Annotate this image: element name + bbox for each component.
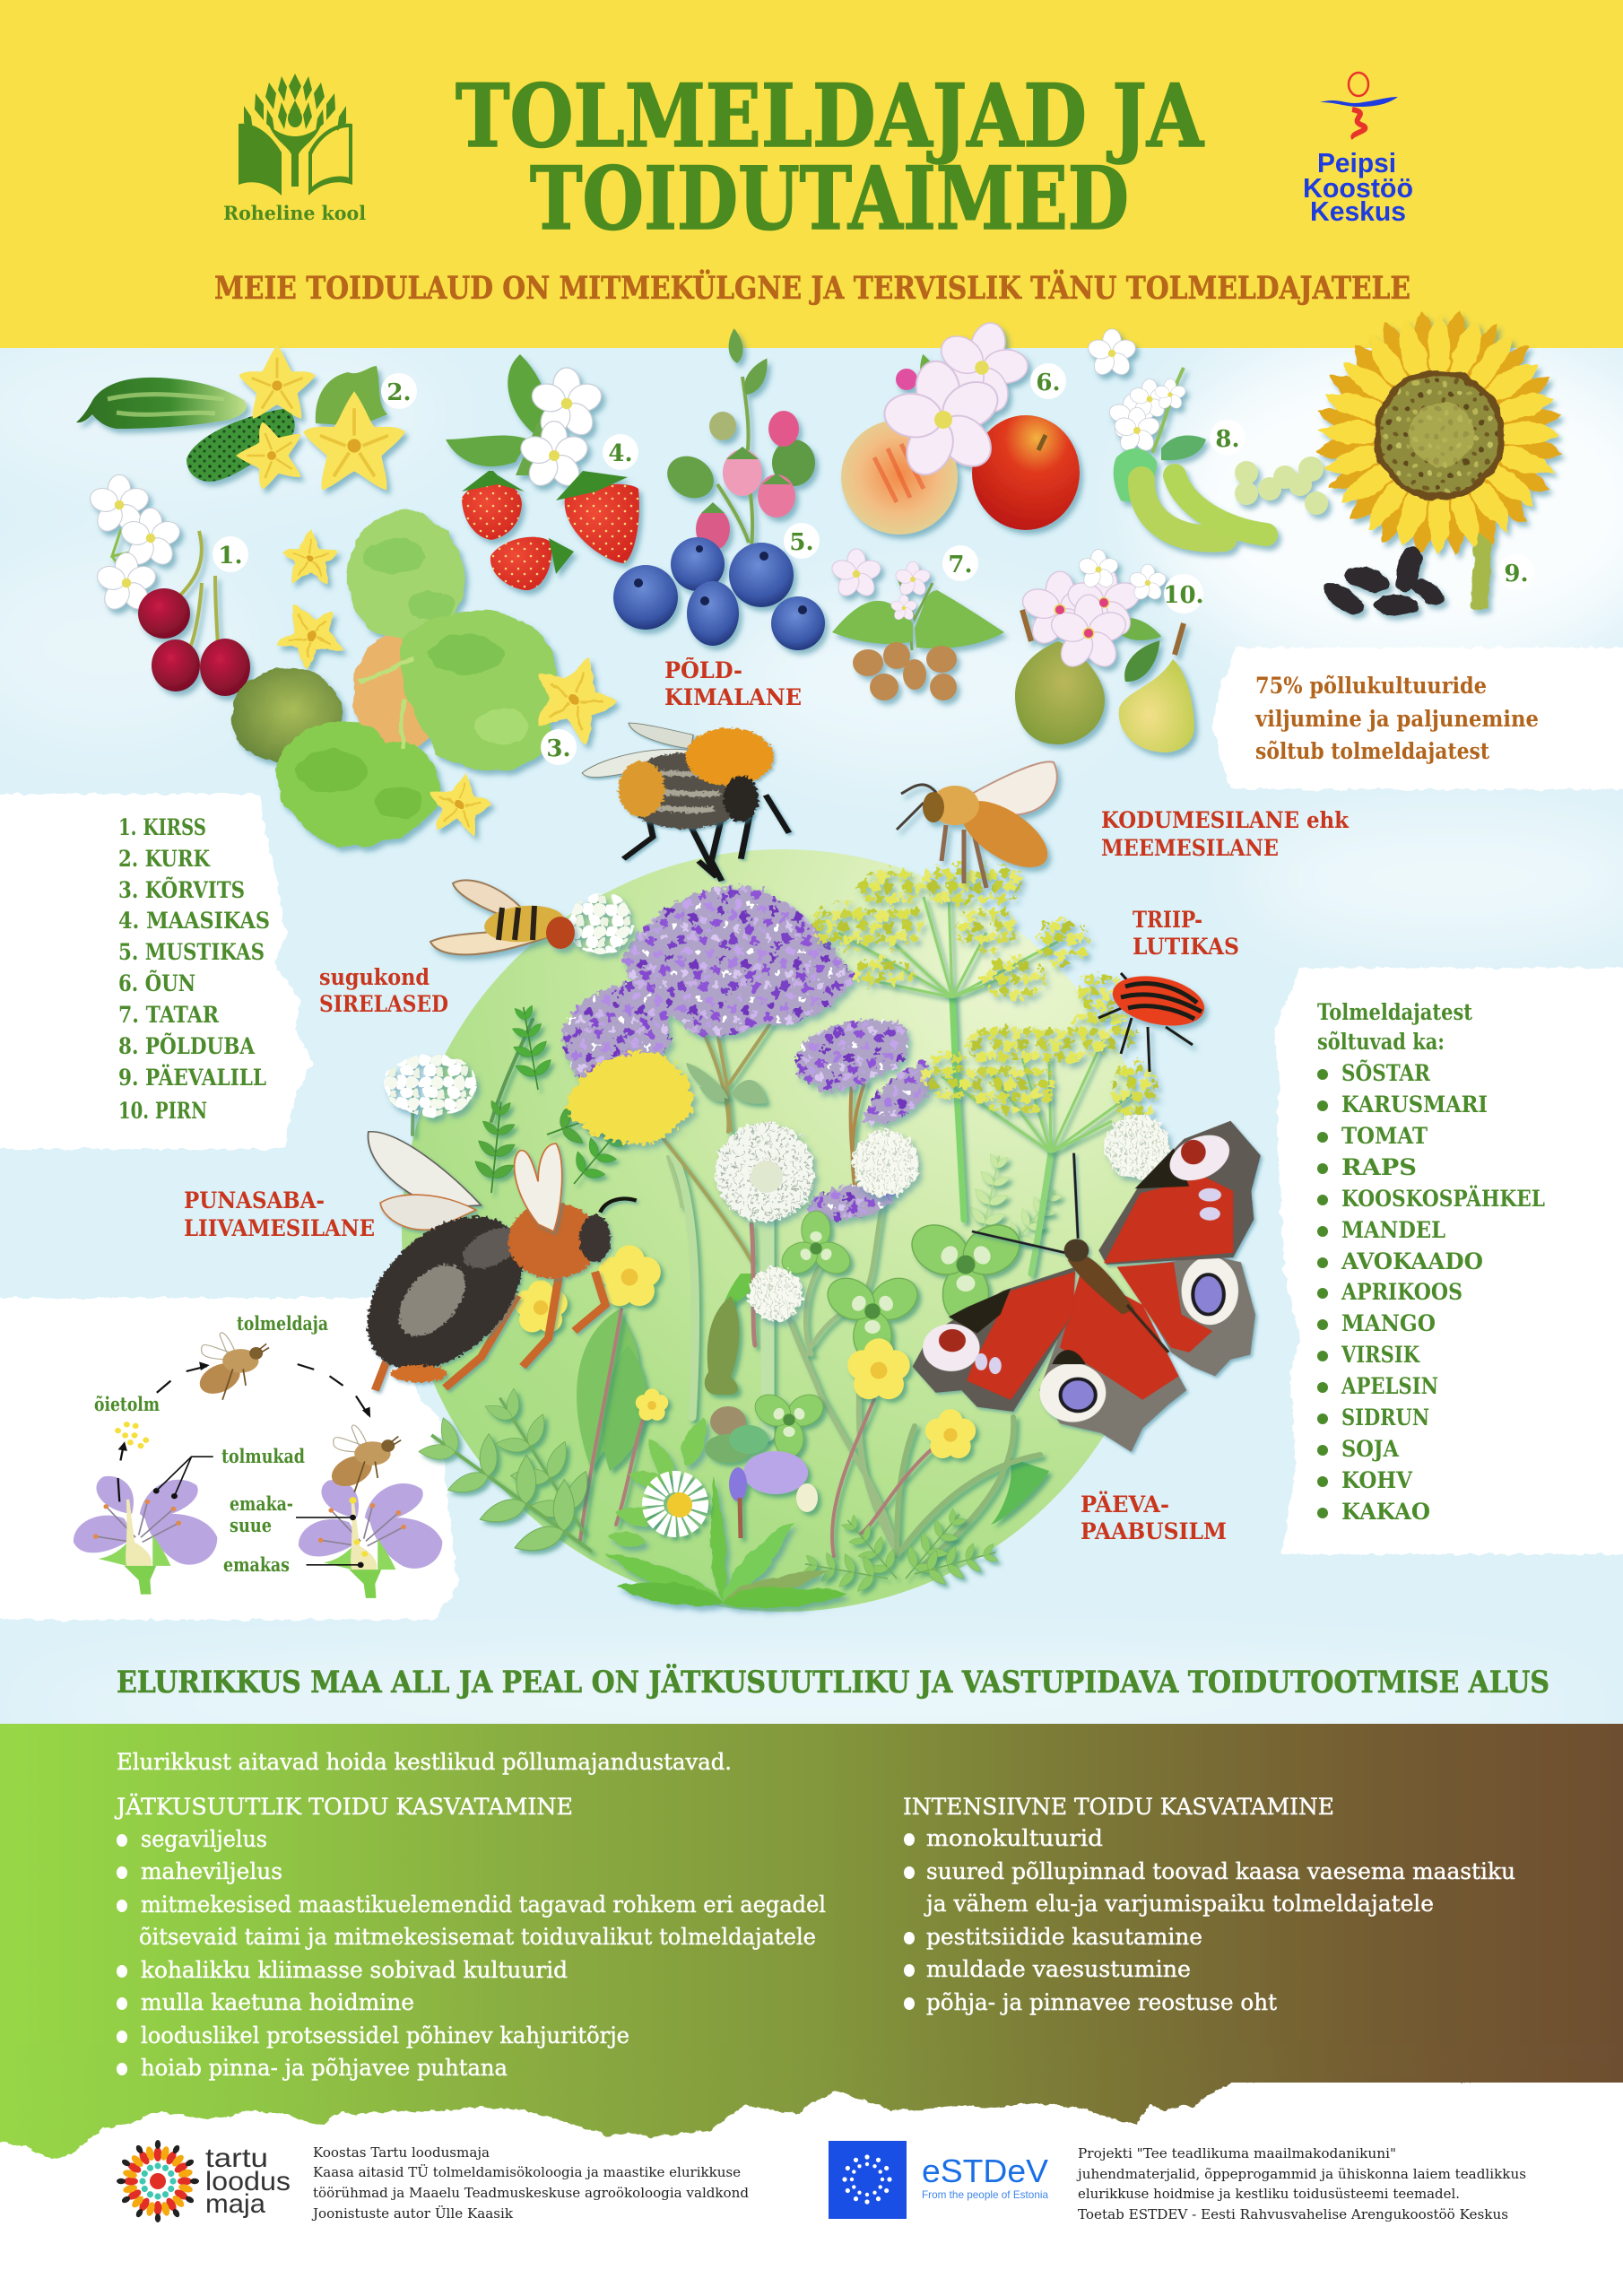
meadow plants xyxy=(383,862,1169,1612)
logo: Peipsi Koostöö Keskus xyxy=(1303,73,1413,227)
panel: crop list: 7. TATAR xyxy=(118,1002,219,1028)
illustration: blueberries xyxy=(613,327,825,650)
purple valerian heads xyxy=(562,886,932,1220)
label: põld-kimalane: PÕLD- xyxy=(664,657,742,683)
panel: other pollinator dependent crops: TOMAT xyxy=(1341,1123,1428,1149)
credits: project: elurikkuse hoidmise ja kestliku toidusüsteemi teemadel. xyxy=(1078,2186,1460,2202)
panel: crop list: 4. MAASIKAS xyxy=(118,908,270,934)
number 5: 5. xyxy=(789,529,814,556)
label: triip-lutikas xyxy=(1133,907,1239,960)
big meadow circle xyxy=(402,849,1164,1612)
number 3 xyxy=(541,729,577,765)
illustration: strawberries xyxy=(446,354,639,590)
subtitle: MEIE TOIDULAUD ON MITMEKÜLGNE JA TERVISLIK TÄNU TOLMELDAJATELE xyxy=(214,268,1410,307)
credits: Tartu loodusmaja: Koostas Tartu loodusmaja xyxy=(313,2144,490,2161)
body and antennae xyxy=(972,1153,1078,1253)
insect: red-tailed mining bee xyxy=(336,1132,637,1396)
panel: other pollinator dependent crops: SOJA xyxy=(1341,1436,1400,1462)
illustration: sunflower xyxy=(1315,309,1563,621)
panel: other pollinator dependent crops xyxy=(1274,968,1623,1554)
column: intensive: suured põllupinnad toovad kaasa vaesema maastiku xyxy=(926,1858,1515,1884)
panel: 75 percent callout xyxy=(1212,648,1623,789)
column: sustainable: looduslikel protsessidel põhinev kahjuritõrje xyxy=(141,2022,629,2048)
column: intensive: põhja- ja pinnavee reostuse oht xyxy=(926,1989,1277,2015)
panel: other pollinator dependent crops: RAPS xyxy=(1341,1154,1417,1180)
pollination diagram: emakas xyxy=(223,1553,290,1576)
dandelion bud xyxy=(705,1296,739,1395)
panel: other pollinator dependent crops: APRIKOOS xyxy=(1341,1279,1462,1305)
column: sustainable: kohalikku kliimasse sobivad kultuurid xyxy=(141,1957,568,1983)
column: intensive: pestitsiidide kasutamine xyxy=(926,1924,1202,1950)
number 2: 2. xyxy=(386,379,412,406)
number 4: 4. xyxy=(608,440,633,467)
panel: other pollinator dependent crops: MANDEL xyxy=(1341,1217,1445,1243)
illustration: pumpkin xyxy=(231,509,629,846)
panel: 75 percent callout: 75% põllukultuuride xyxy=(1255,673,1487,699)
illustration: cucumber xyxy=(76,345,405,490)
pollination diagram xyxy=(74,1312,442,1598)
credits: Tartu loodusmaja: töörühmad ja Maaelu Teadmuskeskuse agroökoloogia valdkond xyxy=(313,2185,749,2201)
logo: Tartu loodusmaja: maja xyxy=(205,2189,265,2219)
ground ivy xyxy=(705,1406,818,1538)
panel: crop list: 6. ÕUN xyxy=(118,970,195,996)
basal leaves rosette xyxy=(601,1474,848,1612)
logo: ESTDEV: eSTDeV xyxy=(922,2152,1048,2189)
panel: other pollinator dependent crops: KARUSMARI xyxy=(1341,1091,1488,1118)
illustration: apples xyxy=(841,311,1080,535)
number 1: 1. xyxy=(218,543,243,570)
panel: other pollinator dependent crops: KAKAO xyxy=(1341,1499,1430,1525)
pollen xyxy=(115,1422,368,1557)
label: päeva-paabusilm: PÄEVA- xyxy=(1081,1492,1169,1518)
credits: project xyxy=(1076,2145,1526,2222)
panel: crop list: 3. KÕRVITS xyxy=(118,877,245,903)
panel: crop list: 8. PÕLDUBA xyxy=(118,1033,256,1059)
credits: Tartu loodusmaja: Joonistuste autor Ülle Kaasik xyxy=(311,2205,514,2222)
number 6: 6. xyxy=(1036,370,1061,396)
logo: Peipsi Koostöö Keskus: Koostöö xyxy=(1303,172,1413,204)
column: sustainable: maheviljelus xyxy=(141,1858,282,1884)
column: sustainable: hoiab pinna- ja põhjavee puhtana xyxy=(141,2055,508,2081)
column: intensive: ja vähem elu-ja varjumispaiku tolmeldajatele xyxy=(924,1891,1434,1917)
label: sugukond sirelased: sugukond xyxy=(319,964,430,990)
title: TOLMELDAJAD JA xyxy=(456,65,1204,167)
label: põld-kimalane: KIMALANE xyxy=(664,684,802,710)
seed, clover heads and yarrow xyxy=(383,893,1169,1321)
bee on flower xyxy=(325,1425,401,1492)
panel: crop list: 2. KURK xyxy=(118,846,211,872)
yellow umbels xyxy=(812,862,1158,1120)
pollination diagram: suue xyxy=(230,1514,272,1536)
flower left xyxy=(74,1476,217,1595)
logo: Roheline kool xyxy=(223,74,366,224)
insect: bumblebee xyxy=(582,723,789,881)
panel: 75 percent callout: sõltub tolmeldajatest xyxy=(1255,738,1489,764)
sage-green leaves by valerian xyxy=(686,1063,767,1104)
panel: crop list: 9. PÄEVALILL xyxy=(118,1065,266,1091)
credits: project: Projekti "Tee teadlikuma maailmakodanikuni" xyxy=(1078,2145,1396,2161)
insect: hoverfly xyxy=(430,880,575,954)
arrows xyxy=(118,1364,369,1565)
column: sustainable: mulla kaetuna hoidmine xyxy=(141,1989,414,2015)
yellow composite flower xyxy=(565,1051,693,1144)
label: sugukond sirelased: SIRELASED xyxy=(319,991,448,1017)
pollination diagram: tolmukad xyxy=(221,1445,305,1467)
number 3: 3. xyxy=(546,735,571,762)
panel: crop list: 5. MUSTIKAS xyxy=(118,939,265,965)
header band xyxy=(0,0,1623,348)
label: kodumesilane xyxy=(1101,807,1350,861)
label: triip-lutikas: LUTIKAS xyxy=(1133,934,1239,960)
illustration: field bean xyxy=(1086,329,1328,539)
umbel stems xyxy=(838,897,1132,1152)
panel: crop list: 1. KIRSS xyxy=(118,814,206,840)
column: sustainable: JÄTKUSUUTLIK TOIDU KASVATAMINE xyxy=(114,1794,573,1820)
insect: striped bug xyxy=(1098,969,1209,1072)
number 8: 8. xyxy=(1215,426,1240,453)
logo: Tartu loodusmaja xyxy=(116,2139,291,2223)
yellow small flowers xyxy=(510,1245,979,1463)
label: punasaba-liivamesilane: LIIVAMESILANE xyxy=(184,1215,375,1241)
logo: Peipsi Koostöö Keskus: Peipsi xyxy=(1317,147,1396,178)
label: kodumesilane: KODUMESILANE ehk xyxy=(1101,807,1350,833)
illustration: pears xyxy=(1015,550,1194,752)
panel: other pollinator dependent crops: SIDRUN xyxy=(1341,1405,1429,1431)
label: triip-lutikas: TRIIP- xyxy=(1133,907,1202,933)
number 1 xyxy=(213,536,248,572)
label: põld-kimalane xyxy=(664,657,802,710)
illustration: buckwheat xyxy=(829,549,1004,700)
sky background with clouds xyxy=(0,332,1623,1749)
label: päeva-paabusilm: PAABUSILM xyxy=(1081,1518,1227,1544)
panel: other pollinator dependent crops: sõltuvad ka: xyxy=(1317,1029,1445,1055)
panel: other pollinator dependent crops: MANGO xyxy=(1341,1310,1436,1336)
label: sugukond sirelased xyxy=(319,964,448,1017)
number 5 xyxy=(784,523,820,559)
panel: other pollinator dependent crops: VIRSIK xyxy=(1341,1342,1420,1368)
panel: other pollinator dependent crops: KOHV xyxy=(1341,1467,1413,1493)
credits: project: juhendmaterjalid, õppeprogammid ja ühiskonna laiem teadlikkus xyxy=(1076,2166,1526,2182)
stems xyxy=(412,997,1051,1565)
panel: other pollinator dependent crops: AVOKAADO xyxy=(1341,1248,1483,1274)
bee top xyxy=(194,1333,269,1400)
intro: Elurikkust aitavad hoida kestlikud põllumajandustavad. xyxy=(117,1749,732,1775)
logo: Roheline kool: Roheline kool xyxy=(223,202,366,224)
pollination diagram: tolmeldaja xyxy=(237,1312,328,1335)
panel: other pollinator dependent crops: APELSIN xyxy=(1341,1373,1438,1399)
column: intensive: monokultuurid xyxy=(926,1825,1103,1851)
trifoliate clover leaves xyxy=(742,1211,1028,1470)
small serrated leaves xyxy=(608,1414,713,1550)
column: sustainable xyxy=(114,1794,826,2081)
pollination diagram: õietolm xyxy=(94,1393,160,1415)
panel: farming comparison gradient band xyxy=(0,1724,1623,2158)
column: intensive xyxy=(903,1794,1515,2015)
panel: pollination diagram background xyxy=(0,1298,458,1620)
number 7: 7. xyxy=(948,552,973,578)
column: sustainable: õitsevaid taimi ja mitmekesisemat toiduvalikut tolmeldajatele xyxy=(139,1924,816,1950)
title: TOIDUTAIMED xyxy=(530,148,1129,249)
insect: honeybee xyxy=(897,761,1058,888)
panel: 75 percent callout: viljumine ja paljunemine xyxy=(1254,706,1539,732)
number 2 xyxy=(381,373,417,409)
lower left wing xyxy=(1039,1276,1186,1452)
logo: ESTDEV: From the people of Estonia xyxy=(922,2188,1048,2201)
label: punasaba-liivamesilane: PUNASABA- xyxy=(184,1187,325,1213)
credits: project: Toetab ESTDEV - Eesti Rahvusvahelise Arengukoostöö Keskus xyxy=(1078,2206,1508,2222)
number 9: 9. xyxy=(1504,561,1529,587)
panel: crop list xyxy=(0,794,313,1149)
panel: crop list: 10. PIRN xyxy=(118,1098,207,1124)
illustration: cherries xyxy=(87,474,250,696)
number 10 xyxy=(1163,574,1204,613)
number 9 xyxy=(1498,554,1534,590)
column: sustainable: mitmekesised maastikuelemendid tagavad rohkem eri aegadel xyxy=(141,1892,826,1918)
lower right wing xyxy=(1122,1255,1255,1376)
number 8 xyxy=(1210,420,1245,456)
upper right wing xyxy=(1098,1121,1261,1265)
number 6 xyxy=(1030,363,1066,399)
credits: Tartu loodusmaja: Kaasa aitasid TÜ tolmeldamisökoloogia ja maastike elurikkuse xyxy=(313,2164,741,2180)
panel: other pollinator dependent crops: KOOSKOSPÄHKEL xyxy=(1341,1186,1545,1212)
credits: Tartu loodusmaja xyxy=(311,2144,749,2222)
title xyxy=(456,65,1204,249)
fern leaves xyxy=(399,1002,1002,1598)
upper left wing xyxy=(913,1267,1075,1412)
panel: other pollinator dependent crops: SÕSTAR xyxy=(1341,1060,1430,1086)
daisy xyxy=(653,1482,698,1526)
label: kodumesilane: MEEMESILANE xyxy=(1101,835,1279,861)
pollination diagram: emaka- xyxy=(230,1492,293,1515)
number 7 xyxy=(942,545,978,581)
label: punasaba-liivamesilane xyxy=(184,1187,375,1241)
column: intensive: INTENSIIVNE TOIDU KASVATAMINE xyxy=(903,1794,1334,1820)
number 10: 10. xyxy=(1163,582,1204,609)
column: sustainable: segaviljelus xyxy=(141,1826,267,1852)
number 4 xyxy=(603,434,638,470)
label: päeva-paabusilm xyxy=(1081,1492,1227,1544)
flower right xyxy=(299,1480,442,1598)
panel: other pollinator dependent crops: Tolmeldajatest xyxy=(1317,999,1472,1025)
logo: ESTDEV xyxy=(829,2141,1048,2219)
insect: peacock butterfly xyxy=(913,1121,1261,1452)
big background leaves xyxy=(577,1150,1072,1525)
column: intensive: muldade vaesustumine xyxy=(926,1956,1191,1982)
logo: Tartu loodusmaja: loodus xyxy=(205,2167,291,2196)
logo: Tartu loodusmaja: tartu xyxy=(205,2144,268,2173)
logo: Peipsi Koostöö Keskus: Keskus xyxy=(1310,196,1406,227)
